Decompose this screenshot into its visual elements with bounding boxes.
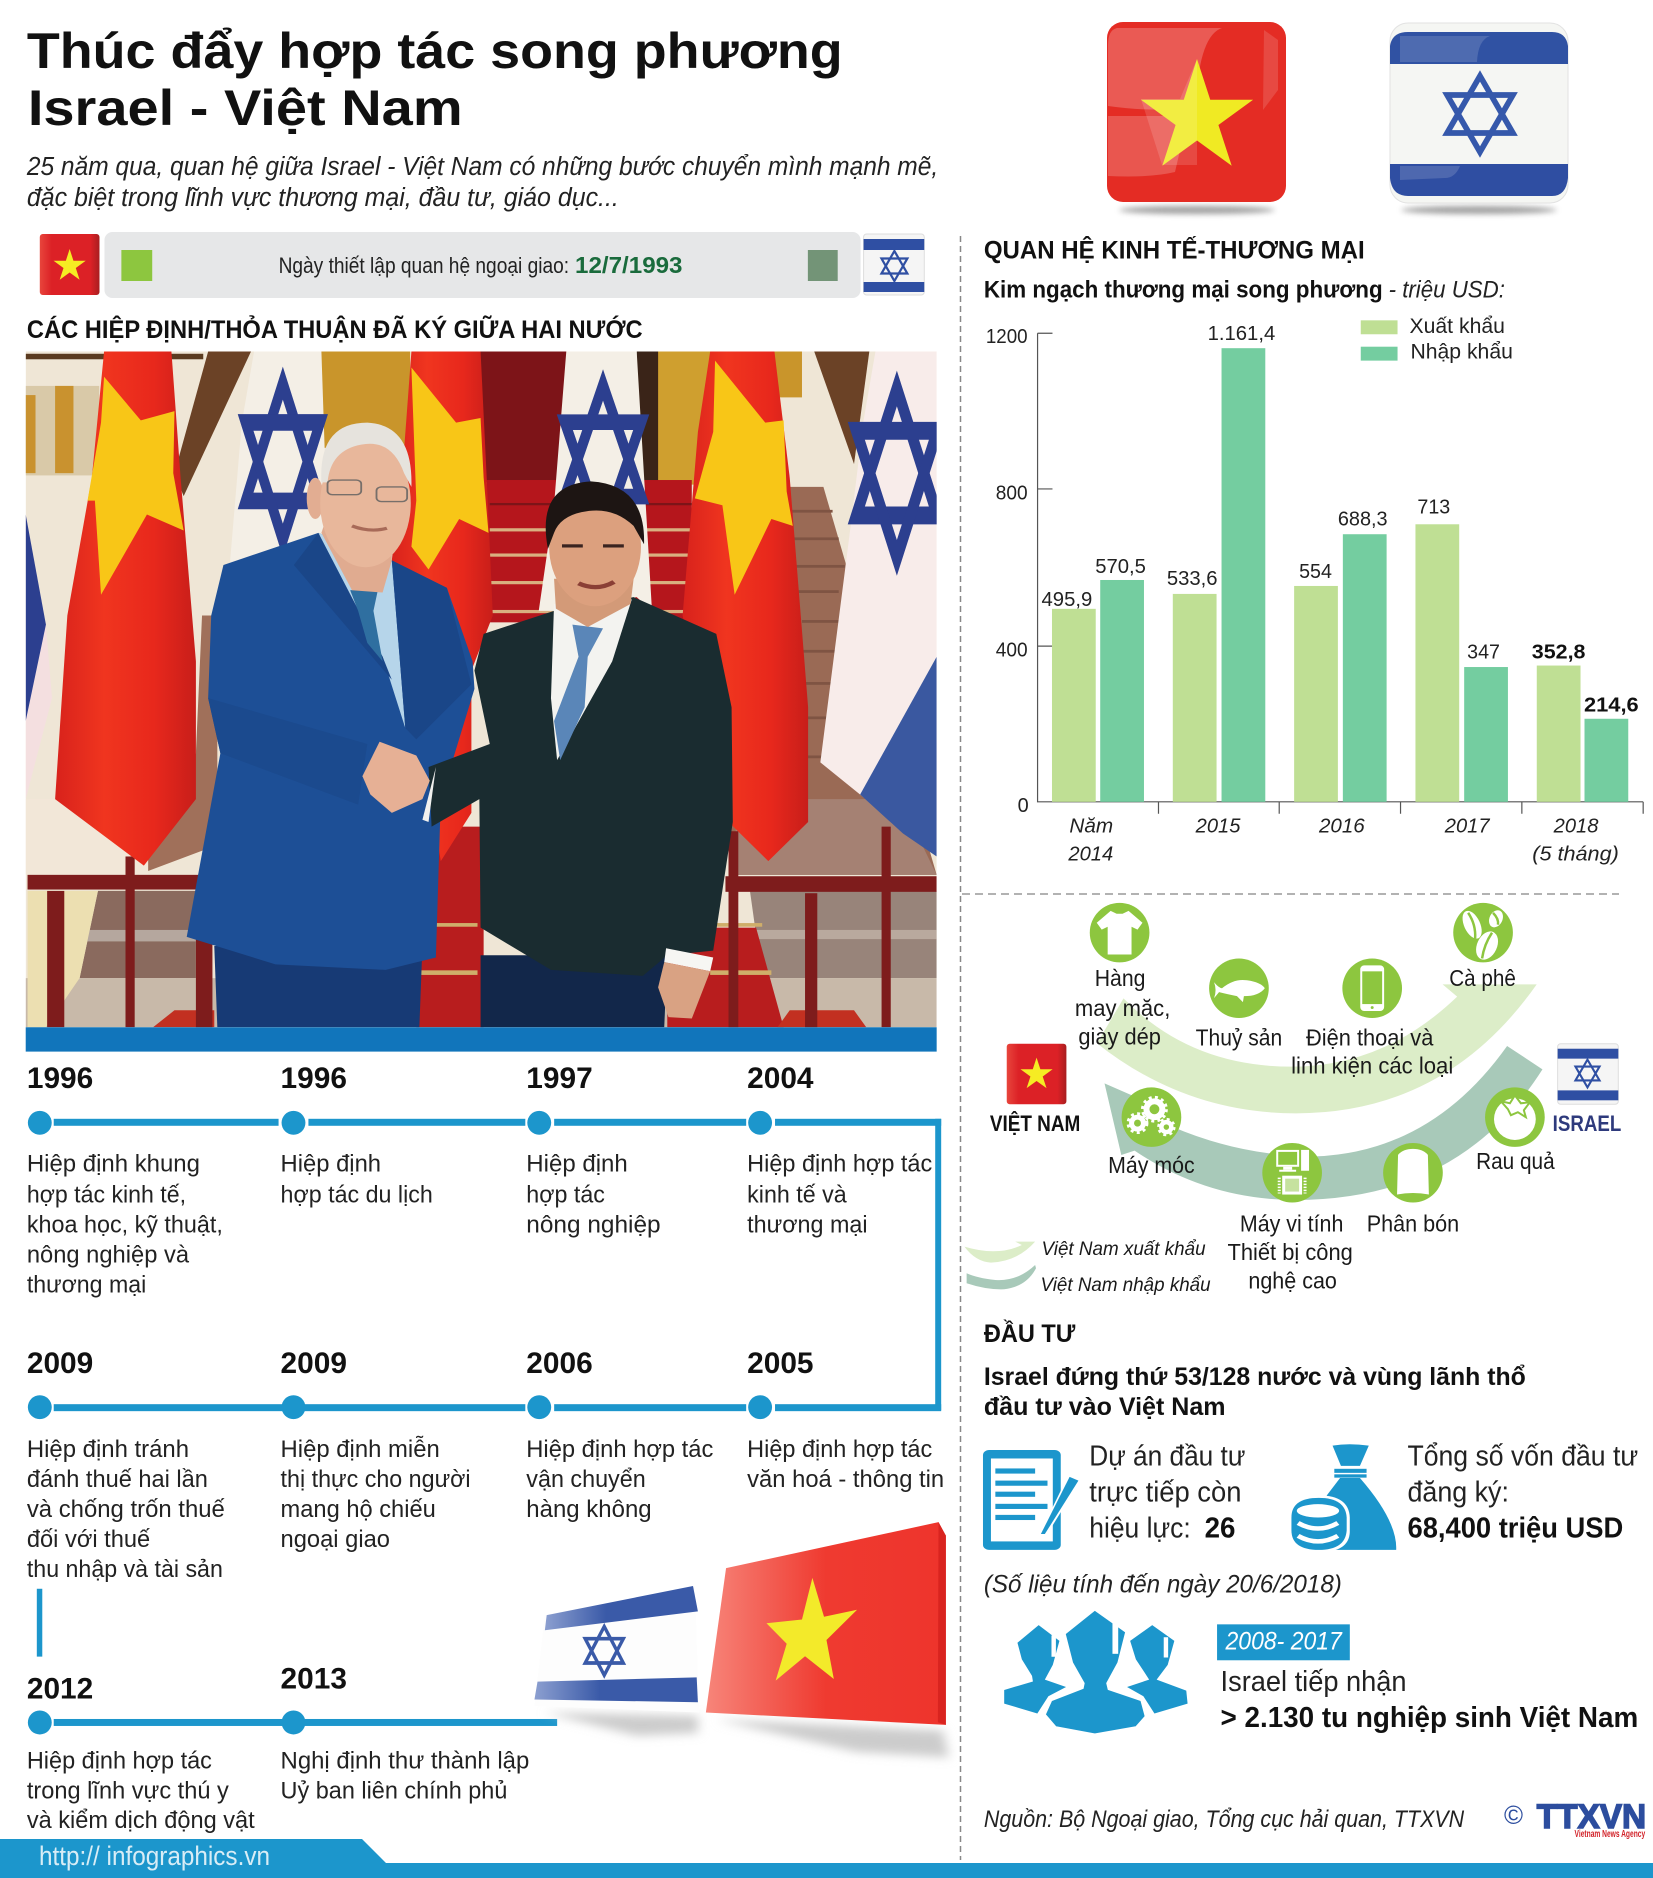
entry: 2006 aviation: 2006 [526,1347,593,1380]
bar value labels: 554 [1299,561,1332,583]
entry: 2006 aviation: Hiệp định hợp tác [526,1436,713,1463]
bar value labels: 688,3 [1338,508,1388,530]
source note: Nguồn: Bộ Ngoại giao, Tổng cục hải quan, TTXVN [984,1806,1465,1833]
entry: 1996 tourism: hợp tác du lịch [281,1182,433,1209]
icon: tomato [1485,1087,1545,1147]
entry: 1996 framework: hợp tác kinh tế, [27,1182,186,1209]
x axis year labels: 2015 [1195,816,1241,838]
bar value labels: 533,6 [1167,568,1218,590]
entry: 1996 framework: thương mại [27,1271,146,1298]
subtitle: 25 năm qua, quan hệ giữa Israel - Việt Nam có những bước chuyển mình mạnh mẽ, [26,153,938,181]
x axis year labels [1067,816,1619,866]
y axis labels: 1200 [986,326,1028,348]
bar value labels: 347 [1467,642,1500,664]
entry: 2005 culture: Hiệp định hợp tác [747,1436,932,1463]
icon: phone [1342,958,1402,1018]
entry: 1996 framework: 1996 [27,1062,93,1095]
diagram legend: Việt Nam nhập khẩu [1041,1274,1211,1296]
entry: 1996 tourism: Hiệp định [281,1151,381,1178]
entry: 2004 trade [747,1062,932,1239]
entry: 2006 aviation: vận chuyển [526,1466,646,1493]
entry: 1996 framework [27,1062,223,1298]
entry: 1996 tourism [281,1062,433,1209]
label: phones and components: linh kiện các loại [1291,1053,1453,1079]
chart legend [1361,315,1513,364]
x axis year labels: 2014 [1067,844,1113,866]
footer website link: http:// infographics.vn [39,1841,270,1871]
x axis year labels: Năm [1069,816,1113,838]
icon: large Vietnam flag [1107,22,1286,214]
entry: 2012 veterinary: 2012 [27,1672,93,1706]
stat: agricultural trainees: > 2.130 tu nghiệp sinh Việt Nam [1221,1702,1638,1734]
logo: TTXVN Vietnam News Agency: TTXVN [1537,1798,1646,1836]
entry: 2013 joint committee: 2013 [281,1663,347,1696]
icon: computer and chip [1262,1143,1322,1202]
entry: 2009 visa exemption [281,1347,471,1553]
label: garments: may mặc, [1075,995,1170,1021]
bar chart: bilateral trade value [986,315,1643,866]
arrow: Vietnam imports [1105,1046,1542,1200]
entry: 1997 agriculture: hợp tác [526,1182,605,1209]
y axis labels: 400 [996,640,1028,662]
label: Việt Nam: VIỆT NAM [990,1111,1080,1136]
entry: 1996 framework: nông nghiệp và [27,1241,190,1268]
bar value labels: 1.161,4 [1208,323,1275,345]
entry: 2009 visa exemption: mang hộ chiếu [281,1496,436,1523]
entry: 1997 agriculture: Hiệp định [526,1151,628,1178]
icon: small Vietnam flag [40,234,99,295]
icon: document and pencil [983,1450,1080,1550]
logo: TTXVN Vietnam News Agency [1504,1798,1646,1840]
heading: economic and trade relations: QUAN HỆ KINH TẾ-THƯƠNG MẠI [984,235,1365,265]
label: phones and components [1291,1025,1453,1079]
bar value labels [1042,323,1639,716]
x axis year labels: (5 tháng) [1532,844,1619,866]
icon: shirt [1090,903,1149,962]
entry: 2012 veterinary [27,1672,255,1834]
entry: 2009 visa exemption: ngoại giao [281,1526,390,1553]
icon: Vietnam flag [1007,1044,1066,1104]
stat: total registered capital: 68,400 triệu USD [1407,1512,1623,1545]
entry: 1997 agriculture: 1997 [526,1062,593,1095]
timeline connector lines [37,1119,941,1726]
entry: 2013 joint committee: Nghị định thư thành lập [281,1747,529,1774]
stat: direct investment projects: trực tiếp còn [1089,1477,1241,1509]
label: seafood: Thuỷ sản [1196,1025,1282,1051]
label: coffee: Cà phê [1449,965,1516,991]
entry: 2006 aviation: hàng không [526,1496,652,1523]
icon: large Israel flag [1390,23,1568,214]
entry: 2009 double taxation [27,1347,225,1583]
entry: 2013 joint committee [281,1663,529,1804]
stat: total registered capital: đăng ký: [1407,1477,1509,1509]
bar value labels: 713 [1417,496,1450,518]
stat: direct investment projects: Dự án đầu tư [1089,1441,1245,1473]
entry: 2013 joint committee: Uỷ ban liên chính phủ [281,1777,507,1804]
label: fertilizer: Phân bón [1367,1211,1459,1237]
stat: direct investment projects: hiệu lực: [1089,1512,1191,1545]
date bar [104,232,861,298]
y axis labels [986,326,1029,817]
stat: total registered capital: Tổng số vốn đầu tư [1407,1441,1638,1473]
entry: 2012 veterinary: và kiểm dịch động vật [27,1807,255,1834]
icon: fertilizer sack [1383,1143,1443,1202]
stat: agricultural trainees: Israel tiếp nhận [1221,1666,1406,1698]
label: computers and high-tech equipment: Thiết bị công [1228,1239,1353,1265]
icon: angled Israel and Vietnam flags [534,1522,949,1757]
chart legend: Nhập khẩu [1410,341,1513,364]
heading: agreements: CÁC HIỆP ĐỊNH/THỎA THUẬN ĐÃ KÝ GIỮA HAI NƯỚC [27,314,643,344]
investment rank statement: đầu tư vào Việt Nam [984,1393,1226,1421]
bar value labels: 495,9 [1042,589,1092,611]
label: computers and high-tech equipment [1228,1211,1353,1293]
label: garments [1075,965,1170,1049]
subtitle: đặc biệt trong lĩnh vực thương mại, đầu tư, giáo dục... [27,184,619,212]
entry: 2005 culture [747,1347,944,1493]
entry: 2009 double taxation: đánh thuế hai lần [27,1466,208,1493]
diagram legend: Việt Nam xuất khẩu [1042,1238,1206,1260]
entry: 2009 double taxation: đối với thuế [27,1526,150,1553]
label: computers and high-tech equipment: Máy vi tính [1240,1211,1343,1237]
entry: 1996 tourism: 1996 [281,1062,347,1095]
diagram legend [964,1238,1211,1296]
entry: 2006 aviation [526,1347,713,1523]
heading: investment: ĐẦU TƯ [984,1319,1076,1348]
y axis labels: 800 [996,482,1028,504]
investment rank statement: Israel đứng thứ 53/128 nước và vùng lãnh thổ [984,1363,1526,1391]
icon: graduates [1004,1609,1188,1735]
entry: 1997 agriculture [526,1062,661,1239]
diagram: export and import flows [964,903,1621,1296]
entry: 2009 double taxation: thu nhập và tài sản [27,1556,223,1583]
note: data date: (Số liệu tính đến ngày 20/6/2018) [984,1570,1342,1598]
icon: Israel flag [1558,1044,1618,1104]
label: garments: Hàng [1095,965,1145,991]
label: garments: giày dép [1078,1023,1161,1049]
entry: 1996 framework: khoa học, kỹ thuật, [27,1212,223,1239]
entry: 2009 visa exemption: 2009 [281,1347,347,1380]
trainee years badge: 2008- 2017 [1225,1627,1343,1655]
stat: agricultural trainees [1221,1666,1638,1734]
diplomatic date banner [40,232,924,298]
bar value labels: 352,8 [1532,642,1585,664]
entry: 2009 visa exemption: thị thực cho người [281,1466,471,1493]
entry: 2012 veterinary: Hiệp định hợp tác [27,1747,212,1774]
icon: money bag and coins [1289,1444,1396,1552]
subtitle [26,153,938,212]
icon: small Israel flag [864,234,924,295]
entry: 1996 framework: Hiệp định khung [27,1151,200,1178]
title [27,23,843,136]
chart legend: Xuất khẩu [1409,315,1505,338]
entry: 2012 veterinary: trong lĩnh vực thú y [27,1777,229,1804]
chart subtitle: Kim ngạch thương mại song phương [984,276,1383,303]
label: computers and high-tech equipment: nghệ cao [1248,1267,1337,1293]
label: Israel: ISRAEL [1553,1111,1621,1136]
title: Thúc đẩy hợp tác song phương [27,23,843,79]
icon: fish [1209,958,1269,1018]
icon: gears [1122,1087,1181,1147]
logo: TTXVN Vietnam News Agency: © [1504,1802,1523,1830]
stat: direct investment projects: 26 [1205,1512,1235,1545]
arrow: Vietnam exports [1097,984,1537,1113]
column divider [960,236,962,1860]
entry: 2004 trade: thương mại [747,1212,868,1239]
chart subtitle: - triệu USD: [1389,276,1505,303]
entry: 2005 culture: 2005 [747,1347,814,1380]
entry: 2009 visa exemption: Hiệp định miễn [281,1436,440,1463]
entry: 1997 agriculture: nông nghiệp [526,1212,661,1239]
stat: total registered capital [1407,1441,1638,1545]
title: Israel - Việt Nam [28,80,463,136]
label: machinery: Máy móc [1108,1152,1195,1178]
investment rank statement [984,1363,1526,1421]
icon: coffee beans [1453,903,1513,963]
entry: 2004 trade: kinh tế và [747,1182,847,1209]
footer band [0,1839,1653,1878]
timeline: agreements by year [27,1062,944,1834]
entry: 2004 trade: 2004 [747,1062,814,1095]
y axis labels: 0 [1018,795,1029,817]
chart axes [1038,333,1643,814]
label: phones and components: Điện thoại và [1306,1025,1434,1051]
entry: 2009 double taxation: và chống trốn thuế [27,1496,225,1523]
bars: exports and imports [1052,348,1628,802]
entry: 2004 trade: Hiệp định hợp tác [747,1151,932,1178]
photo: the two leaders shaking hands [26,351,937,1052]
x axis year labels: 2016 [1318,816,1366,838]
entry: 2009 double taxation: Hiệp định tránh [27,1436,189,1463]
bar value labels: 570,5 [1095,556,1146,578]
bar value labels: 214,6 [1584,694,1639,716]
stat: direct investment projects [1089,1441,1245,1545]
date bar: Ngày thiết lập quan hệ ngoại giao: [279,253,569,278]
x axis year labels: 2017 [1444,816,1490,838]
label: vegetables and fruit: Rau quả [1476,1148,1555,1174]
timeline dots [28,1111,772,1734]
entry: 2005 culture: văn hoá - thông tin [747,1466,944,1493]
entry: 2009 double taxation: 2009 [27,1347,93,1380]
date bar: 12/7/1993 [575,252,683,278]
x axis year labels: 2018 [1553,816,1598,838]
